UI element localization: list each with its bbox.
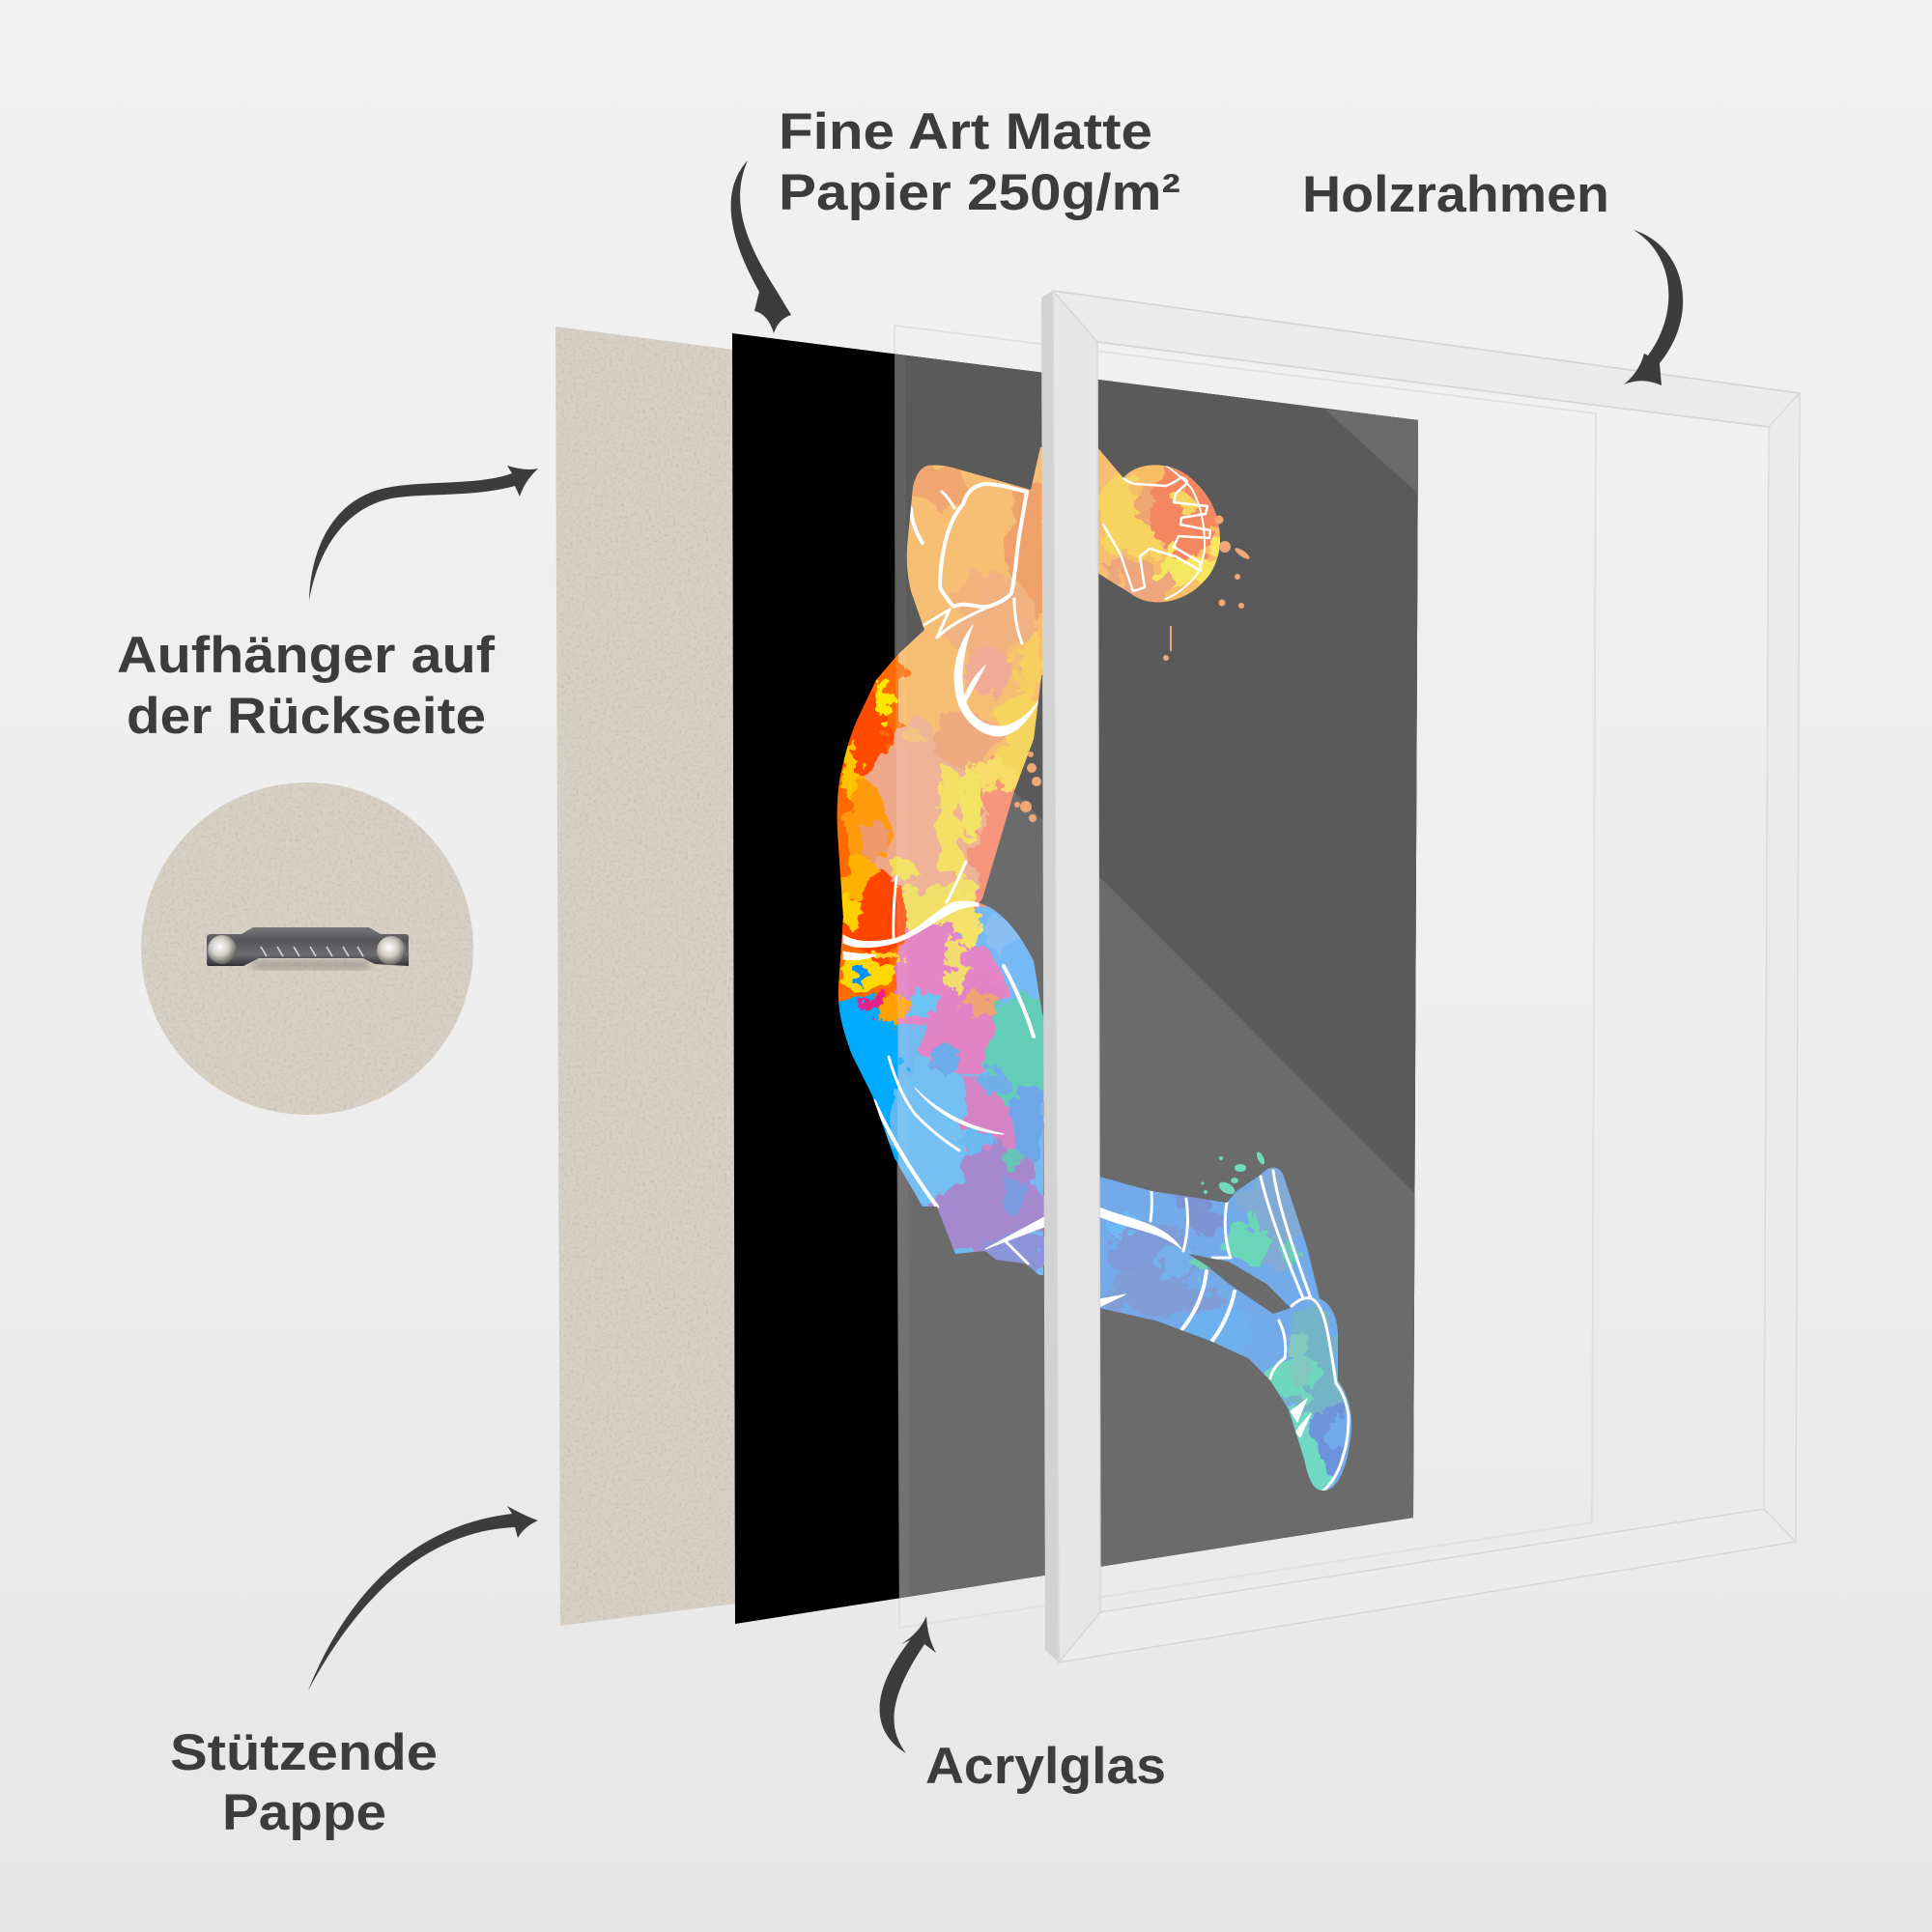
paint splatters [1014,516,1251,822]
label: Fine Art Matte Papier: Fine Art Matte [779,103,1152,160]
arrow: to cardboard from support label [308,1506,538,1690]
cardboard disc [141,782,473,1115]
shoe splatters [1202,1151,1266,1197]
label: Fine Art Matte Papier [779,103,1180,221]
label: Stützende Pappe [170,1724,438,1841]
panel: fine art paper [732,290,1420,1642]
artwork: basketball player [837,447,1352,1491]
right rivet [377,936,406,965]
panel: acrylic glass over the background [895,326,1596,1628]
acrylic tinted area on paper [895,290,1420,1642]
player white contour lines [843,466,1349,1491]
detail circle: hanger on cardboard [141,782,473,1115]
frame bottom bar [1059,1509,1796,1662]
label: Stützende Pappe: Pappe [222,1784,386,1841]
shorts strokes [1004,966,1034,1037]
leg strokes [1099,1208,1181,1249]
player large paint splashes [813,460,1345,1507]
left rivet [208,935,237,964]
player fine paint splashes [838,483,1309,1386]
hand and ball [1103,477,1210,591]
label: Aufhänger auf der Rückseite: der Rückseite [127,688,486,745]
arrow: to acrylic [880,1616,936,1753]
label: Fine Art Matte Papier: Papier 250g/m² [779,164,1180,221]
arrow: to cardboard from hanger label [309,466,538,601]
waist band [843,901,979,948]
black paper sheet [732,333,1418,1624]
frame left bar [1053,291,1100,1662]
hanger teeth [261,947,363,956]
arm outline [940,484,1027,607]
label: Stützende Pappe: Stützende [170,1724,438,1781]
player solid base colours [831,406,1362,1507]
frame side face [1041,291,1059,1662]
hanger plate [207,927,409,966]
panel: wooden frame [1041,291,1800,1662]
frame right bar [1764,393,1800,1542]
large armpit crescent [954,625,1041,736]
arrow: to frame [1624,230,1683,385]
label: Aufhänger auf der Rückseite [117,627,495,745]
arrow: to paper [731,160,791,333]
hanger shadow [253,960,369,970]
shoe strokes [1261,1171,1311,1298]
panel: support cardboard [551,319,744,1633]
label: Holzrahmen: Holzrahmen [1302,166,1609,223]
acrylic wash over paper [895,290,1420,1642]
frame top bar [1053,291,1800,427]
label: Aufhänger auf der Rückseite: Aufhänger auf [117,627,495,684]
label: Acrylglas: Acrylglas [925,1738,1166,1795]
